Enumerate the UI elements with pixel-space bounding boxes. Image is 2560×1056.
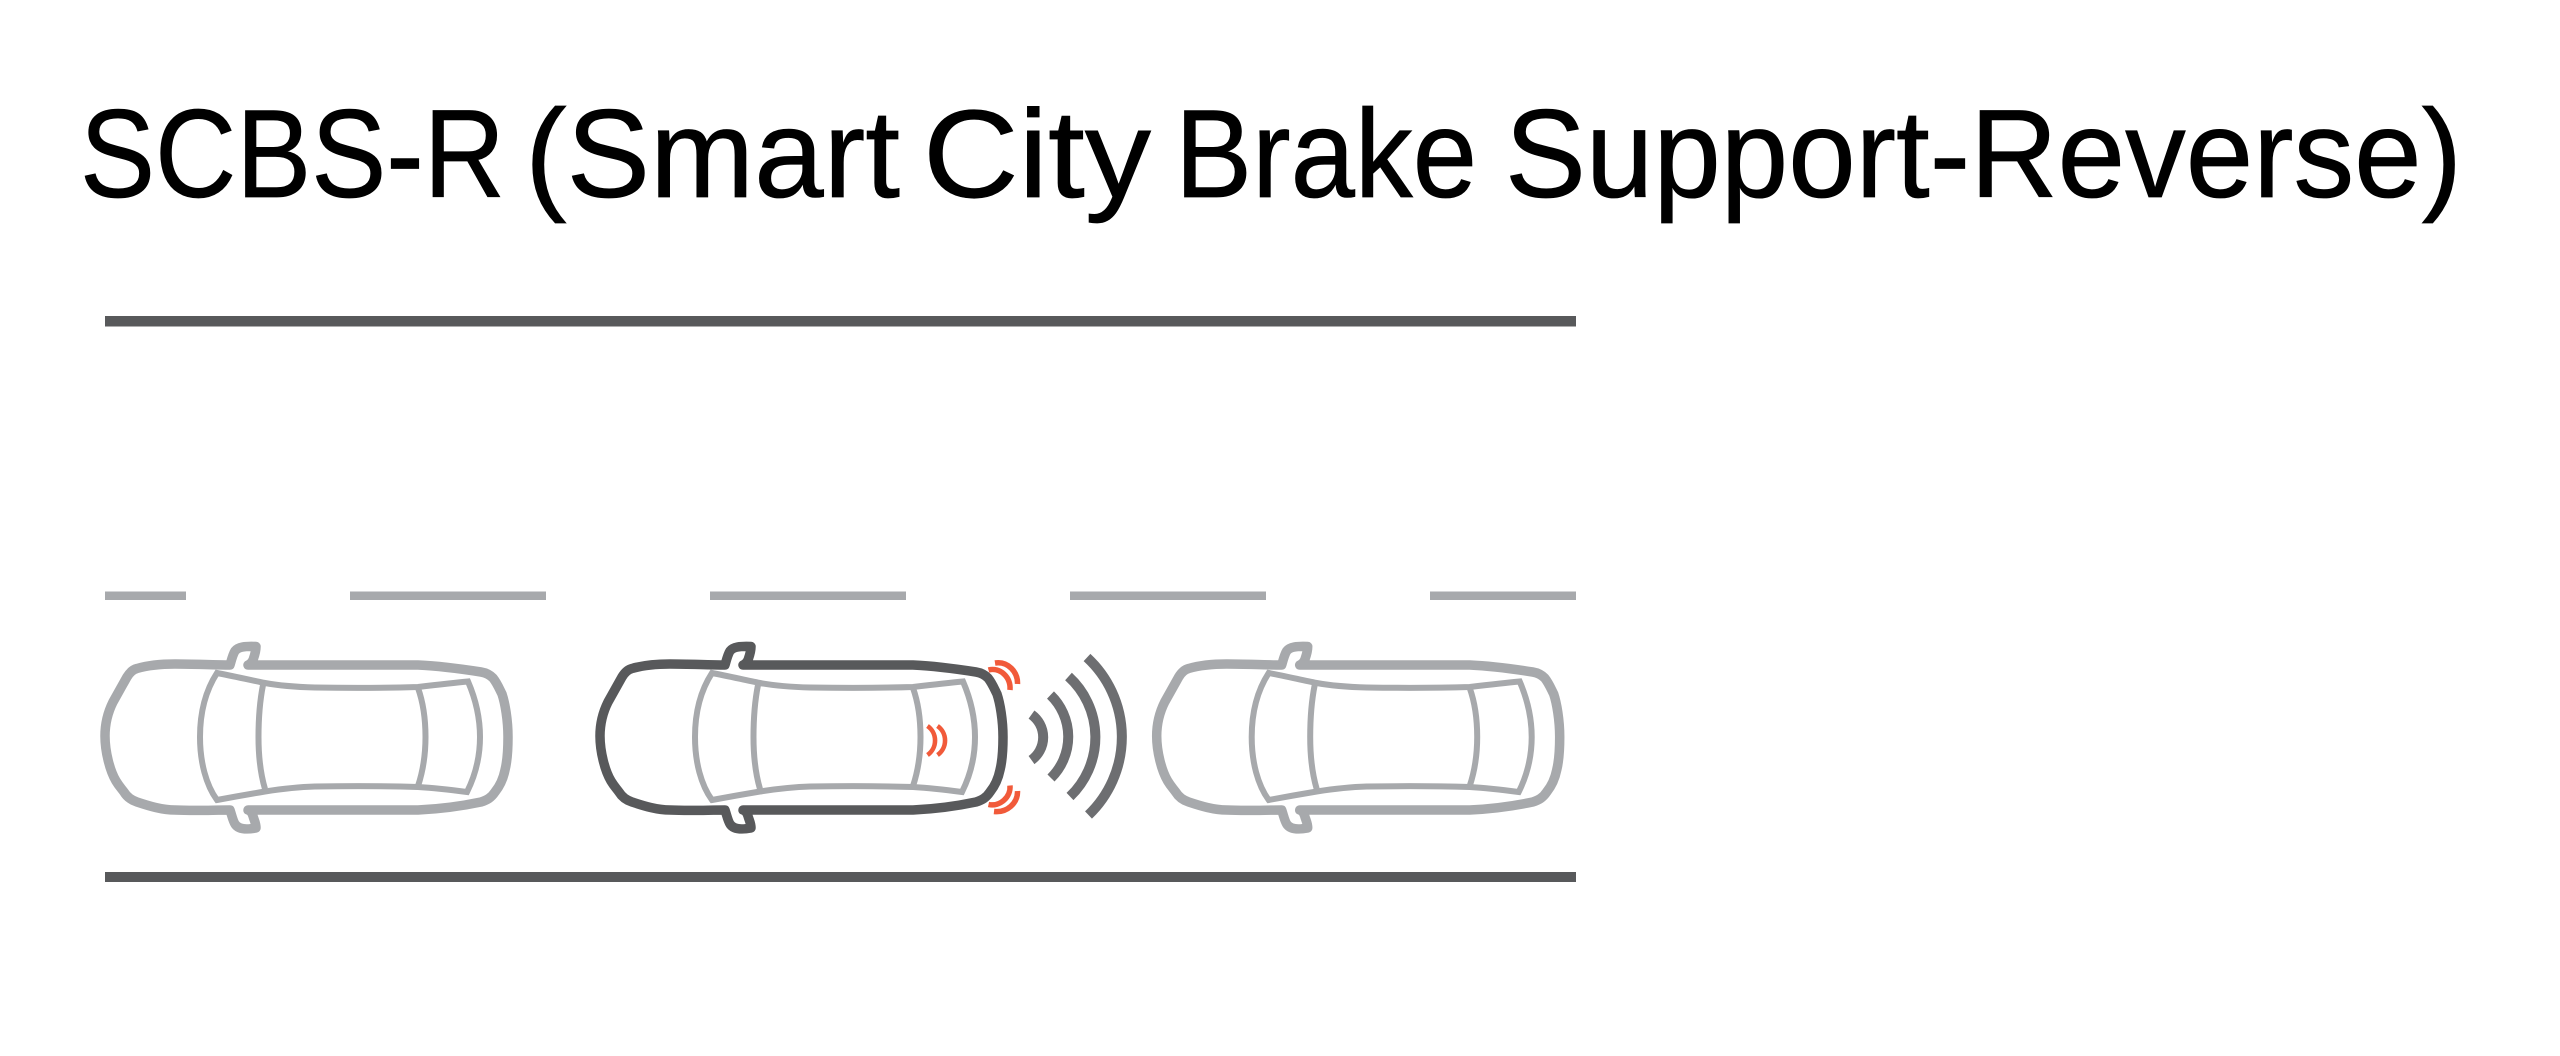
title: Brake	[1175, 85, 1477, 224]
title	[80, 85, 2462, 224]
icon: dashboard alert (red)	[928, 726, 945, 755]
title: Support-Reverse)	[1505, 85, 2462, 224]
icon: corner sensor top (red)	[988, 663, 1018, 690]
icon: corner sensor bottom (red)	[988, 786, 1018, 812]
title: (Smart	[525, 85, 900, 224]
title: City	[923, 85, 1152, 224]
road: bottom edge line	[105, 872, 1576, 882]
title: SCBS-R	[80, 85, 505, 224]
car: rear left (grey)	[105, 646, 508, 829]
car: obstacle vehicle behind (grey)	[1157, 646, 1560, 829]
road: lane dashes	[105, 592, 1576, 600]
icon: ultrasonic sensor waves	[1032, 658, 1122, 815]
car: reversing vehicle with SCBS-R (dark)	[600, 646, 1003, 829]
road: top edge line	[105, 316, 1576, 326]
